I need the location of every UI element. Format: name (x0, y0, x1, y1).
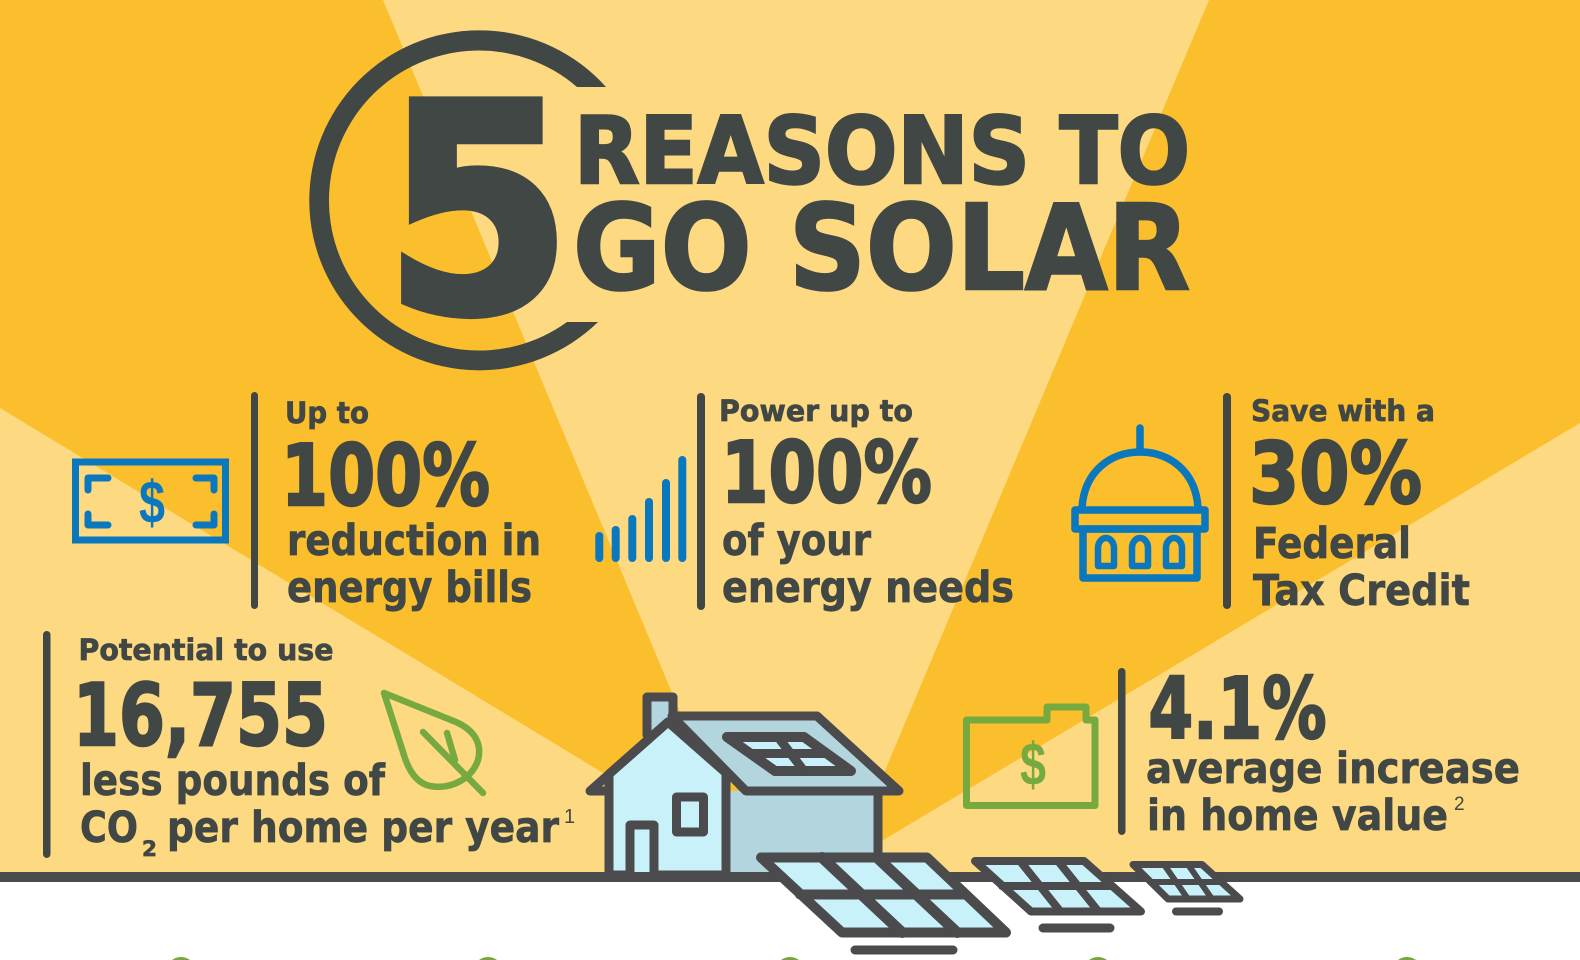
text: up to 100% reduction in energy bills: reduction in (287, 516, 541, 566)
text: power up to 100% of your energy needs: of your (722, 516, 872, 566)
title badge: circle arc (309, 30, 606, 370)
divider bar (697, 393, 705, 610)
text: 4.1% average increase in home value: average increase (1146, 744, 1520, 794)
text: save with a 30% federal tax credit: Tax Credit (1253, 566, 1470, 616)
panel: energy bill reduction (76, 392, 541, 613)
large ground solar panel (761, 858, 1006, 950)
text: potential to use 16,755 less pounds of CO2: Potential to use (78, 633, 334, 667)
house illustration (590, 697, 899, 875)
icon: folder with dollar (966, 707, 1095, 806)
text: save with a 30% federal tax credit: Save with a (1251, 394, 1435, 428)
text: save with a 30% federal tax credit: Federal (1253, 519, 1411, 569)
panel: federal tax credit (1075, 393, 1470, 616)
text: save with a 30% federal tax credit: 30% (1249, 425, 1422, 524)
text: potential to use 16,755 less pounds of CO2: 1 (564, 806, 575, 828)
small ground solar panel (1133, 864, 1240, 912)
roof solar panel (727, 737, 851, 771)
text: potential to use 16,755 less pounds of CO2: per home per year (167, 803, 560, 853)
icon: dollar bill (76, 462, 226, 540)
text: save with a 30% federal tax credit (1249, 394, 1470, 616)
text: potential to use 16,755 less pounds of CO2: CO (80, 803, 138, 853)
text: potential to use 16,755 less pounds of CO2: 16,755 (73, 666, 328, 766)
text: up to 100% reduction in energy bills: Up to (285, 396, 369, 430)
icon: capitol dome (1075, 428, 1205, 578)
divider bar (1118, 668, 1126, 835)
divider bar (251, 392, 258, 609)
text: power up to 100% of your energy needs: Power up to (719, 394, 913, 428)
title numeral 5: 5 (384, 44, 572, 380)
title text (573, 97, 1190, 317)
text: up to 100% reduction in energy bills (281, 396, 541, 613)
ground line (0, 872, 1580, 882)
text: power up to 100% of your energy needs: 100% (721, 424, 932, 523)
text: 4.1% average increase in home value (1146, 660, 1520, 841)
icon: dollar bill: $ (139, 469, 165, 536)
text: power up to 100% of your energy needs: energy needs (722, 563, 1014, 613)
text: potential to use 16,755 less pounds of CO2 (73, 633, 575, 861)
divider bar (1223, 393, 1231, 609)
title text: REASONS TO (574, 97, 1190, 205)
divider bar (43, 631, 50, 858)
title text: GO SOLAR (573, 179, 1190, 317)
icon: leaf (384, 693, 483, 793)
text: up to 100% reduction in energy bills: 100% (281, 427, 490, 526)
text: potential to use 16,755 less pounds of CO2: less pounds of (80, 756, 386, 806)
text: 4.1% average increase in home value: 4.1% (1148, 660, 1326, 759)
text: 4.1% average increase in home value: in home value (1147, 791, 1448, 841)
panel: home value (966, 660, 1520, 841)
text: potential to use 16,755 less pounds of CO2: 2 (142, 837, 157, 861)
medium ground solar panel (975, 861, 1141, 928)
text: up to 100% reduction in energy bills: energy bills (287, 563, 532, 613)
icon: signal bars (599, 460, 682, 558)
text: 4.1% average increase in home value: 2 (1454, 794, 1465, 815)
panel: CO2 savings (43, 631, 575, 861)
icon: folder with dollar: $ (1020, 731, 1046, 798)
green dots cropped at bottom (166, 957, 1422, 960)
text: power up to 100% of your energy needs (719, 394, 1014, 613)
panel: energy needs (599, 393, 1014, 613)
